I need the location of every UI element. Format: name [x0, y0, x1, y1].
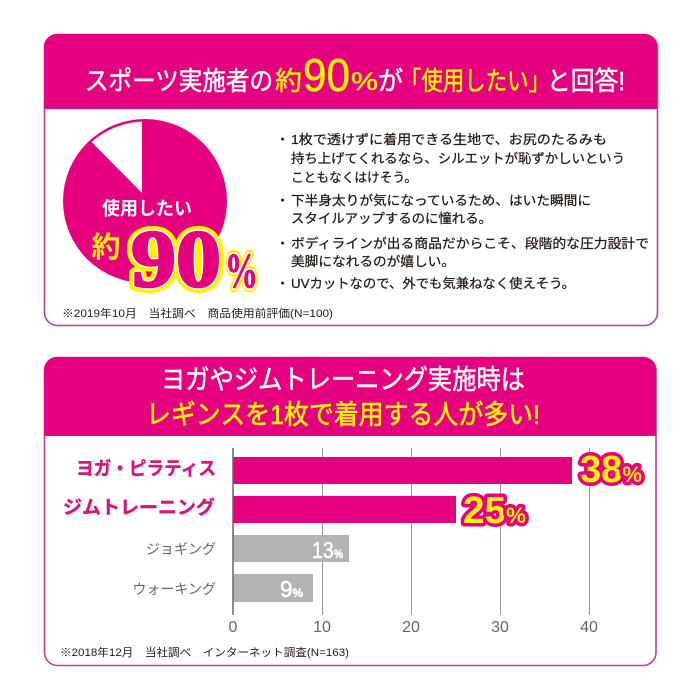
- callout: about 90 percent: [91, 213, 258, 304]
- callout: about 90 percent: %: [225, 242, 258, 298]
- category label: gym training: ジムトレーニング: [63, 497, 215, 518]
- panel: survey result: [44, 34, 658, 326]
- heading: survey result: と回答!: [547, 66, 625, 96]
- axis labels: [229, 619, 598, 636]
- axis labels: 0: [229, 619, 238, 636]
- comment 1: こともなくはけそう。: [291, 170, 417, 185]
- value: 13 percent: 13%: [312, 537, 343, 563]
- value: 9 percent: 9%: [280, 576, 303, 602]
- bar: yoga pilates: [233, 457, 572, 484]
- axis labels: 40: [580, 619, 598, 636]
- panel header: leggings usage: [44, 357, 656, 436]
- pie label: want to use: 使用したい: [102, 198, 192, 219]
- comment 2: スタイルアップするのに憧れる。: [291, 211, 492, 226]
- text block: respondent comments: [276, 131, 649, 291]
- heading: line one: ヨガやジムトレーニング実施時は: [161, 365, 525, 395]
- value: 25 percent: 25%: [463, 490, 526, 532]
- pie chart: about 90 percent: [63, 119, 227, 283]
- callout: about 90 percent: 90: [131, 213, 221, 304]
- category label: jogging: ジョギング: [146, 541, 216, 557]
- footnote: survey source: ※2019年10月 当社調べ 商品使用前評価(N=100): [62, 306, 333, 320]
- heading: line two: レギンスを1枚で着用する人が多い!: [146, 400, 540, 430]
- bar: gym training: [233, 496, 456, 523]
- callout: about 90 percent: %: [225, 242, 258, 298]
- comment 1: [276, 131, 625, 185]
- comment 1: 1枚で透けずに着用できる生地で、お尻のたるみも: [291, 131, 607, 147]
- axis line: [232, 448, 234, 615]
- comment 1: 持ち上げてくれるなら、シルエットが恥ずかしいという: [291, 151, 625, 166]
- comment 2: ・: [276, 193, 289, 208]
- callout: about 90 percent: 約: [91, 231, 121, 264]
- comment 3: [276, 235, 649, 269]
- axis labels: 30: [491, 619, 509, 636]
- comment 4: ・: [276, 276, 289, 291]
- callout: about 90 percent: 90: [131, 213, 221, 304]
- bar: walking: [233, 574, 313, 602]
- axis labels: 20: [402, 619, 420, 636]
- heading: survey result: %: [351, 68, 378, 96]
- grid lines: [322, 448, 590, 615]
- comment 2: [276, 193, 591, 226]
- comment 2: 下半身太りが気になっているため、はいた瞬間に: [291, 193, 591, 208]
- category label: yoga pilates: ヨガ・ピラティス: [76, 458, 216, 479]
- heading: survey result: [85, 49, 625, 101]
- value: 38 percent: 38%: [580, 449, 642, 491]
- panel header: survey result: [44, 34, 657, 109]
- heading: survey result: が: [378, 66, 403, 96]
- comment 4: UVカットなので、外でも気兼ねなく使えそう。: [291, 275, 575, 291]
- comment 1: ・: [276, 132, 289, 147]
- heading: survey result: 「使用したい」: [400, 66, 550, 96]
- footnote: internet survey: ※2018年12月 当社調べ インターネット調査(N=163): [60, 645, 349, 659]
- comment 3: ・: [276, 236, 289, 251]
- callout: about 90 percent: 90: [131, 213, 221, 304]
- bar chart: activities: [63, 448, 642, 636]
- panel: leggings usage: [44, 357, 656, 666]
- category label: walking: ウォーキング: [132, 581, 216, 597]
- heading: survey result: 約: [275, 66, 302, 96]
- heading: survey result: 90: [303, 49, 350, 101]
- heading: survey result: スポーツ実施者の: [85, 66, 273, 96]
- axis labels: 10: [313, 619, 331, 636]
- comment 3: ボディラインが出る商品だからこそ、段階的な圧力設計で: [291, 235, 649, 251]
- bar: jogging: [233, 535, 349, 562]
- callout: about 90 percent: %: [225, 242, 258, 298]
- comment 3: 美脚になれるのが嬉しい。: [291, 253, 455, 269]
